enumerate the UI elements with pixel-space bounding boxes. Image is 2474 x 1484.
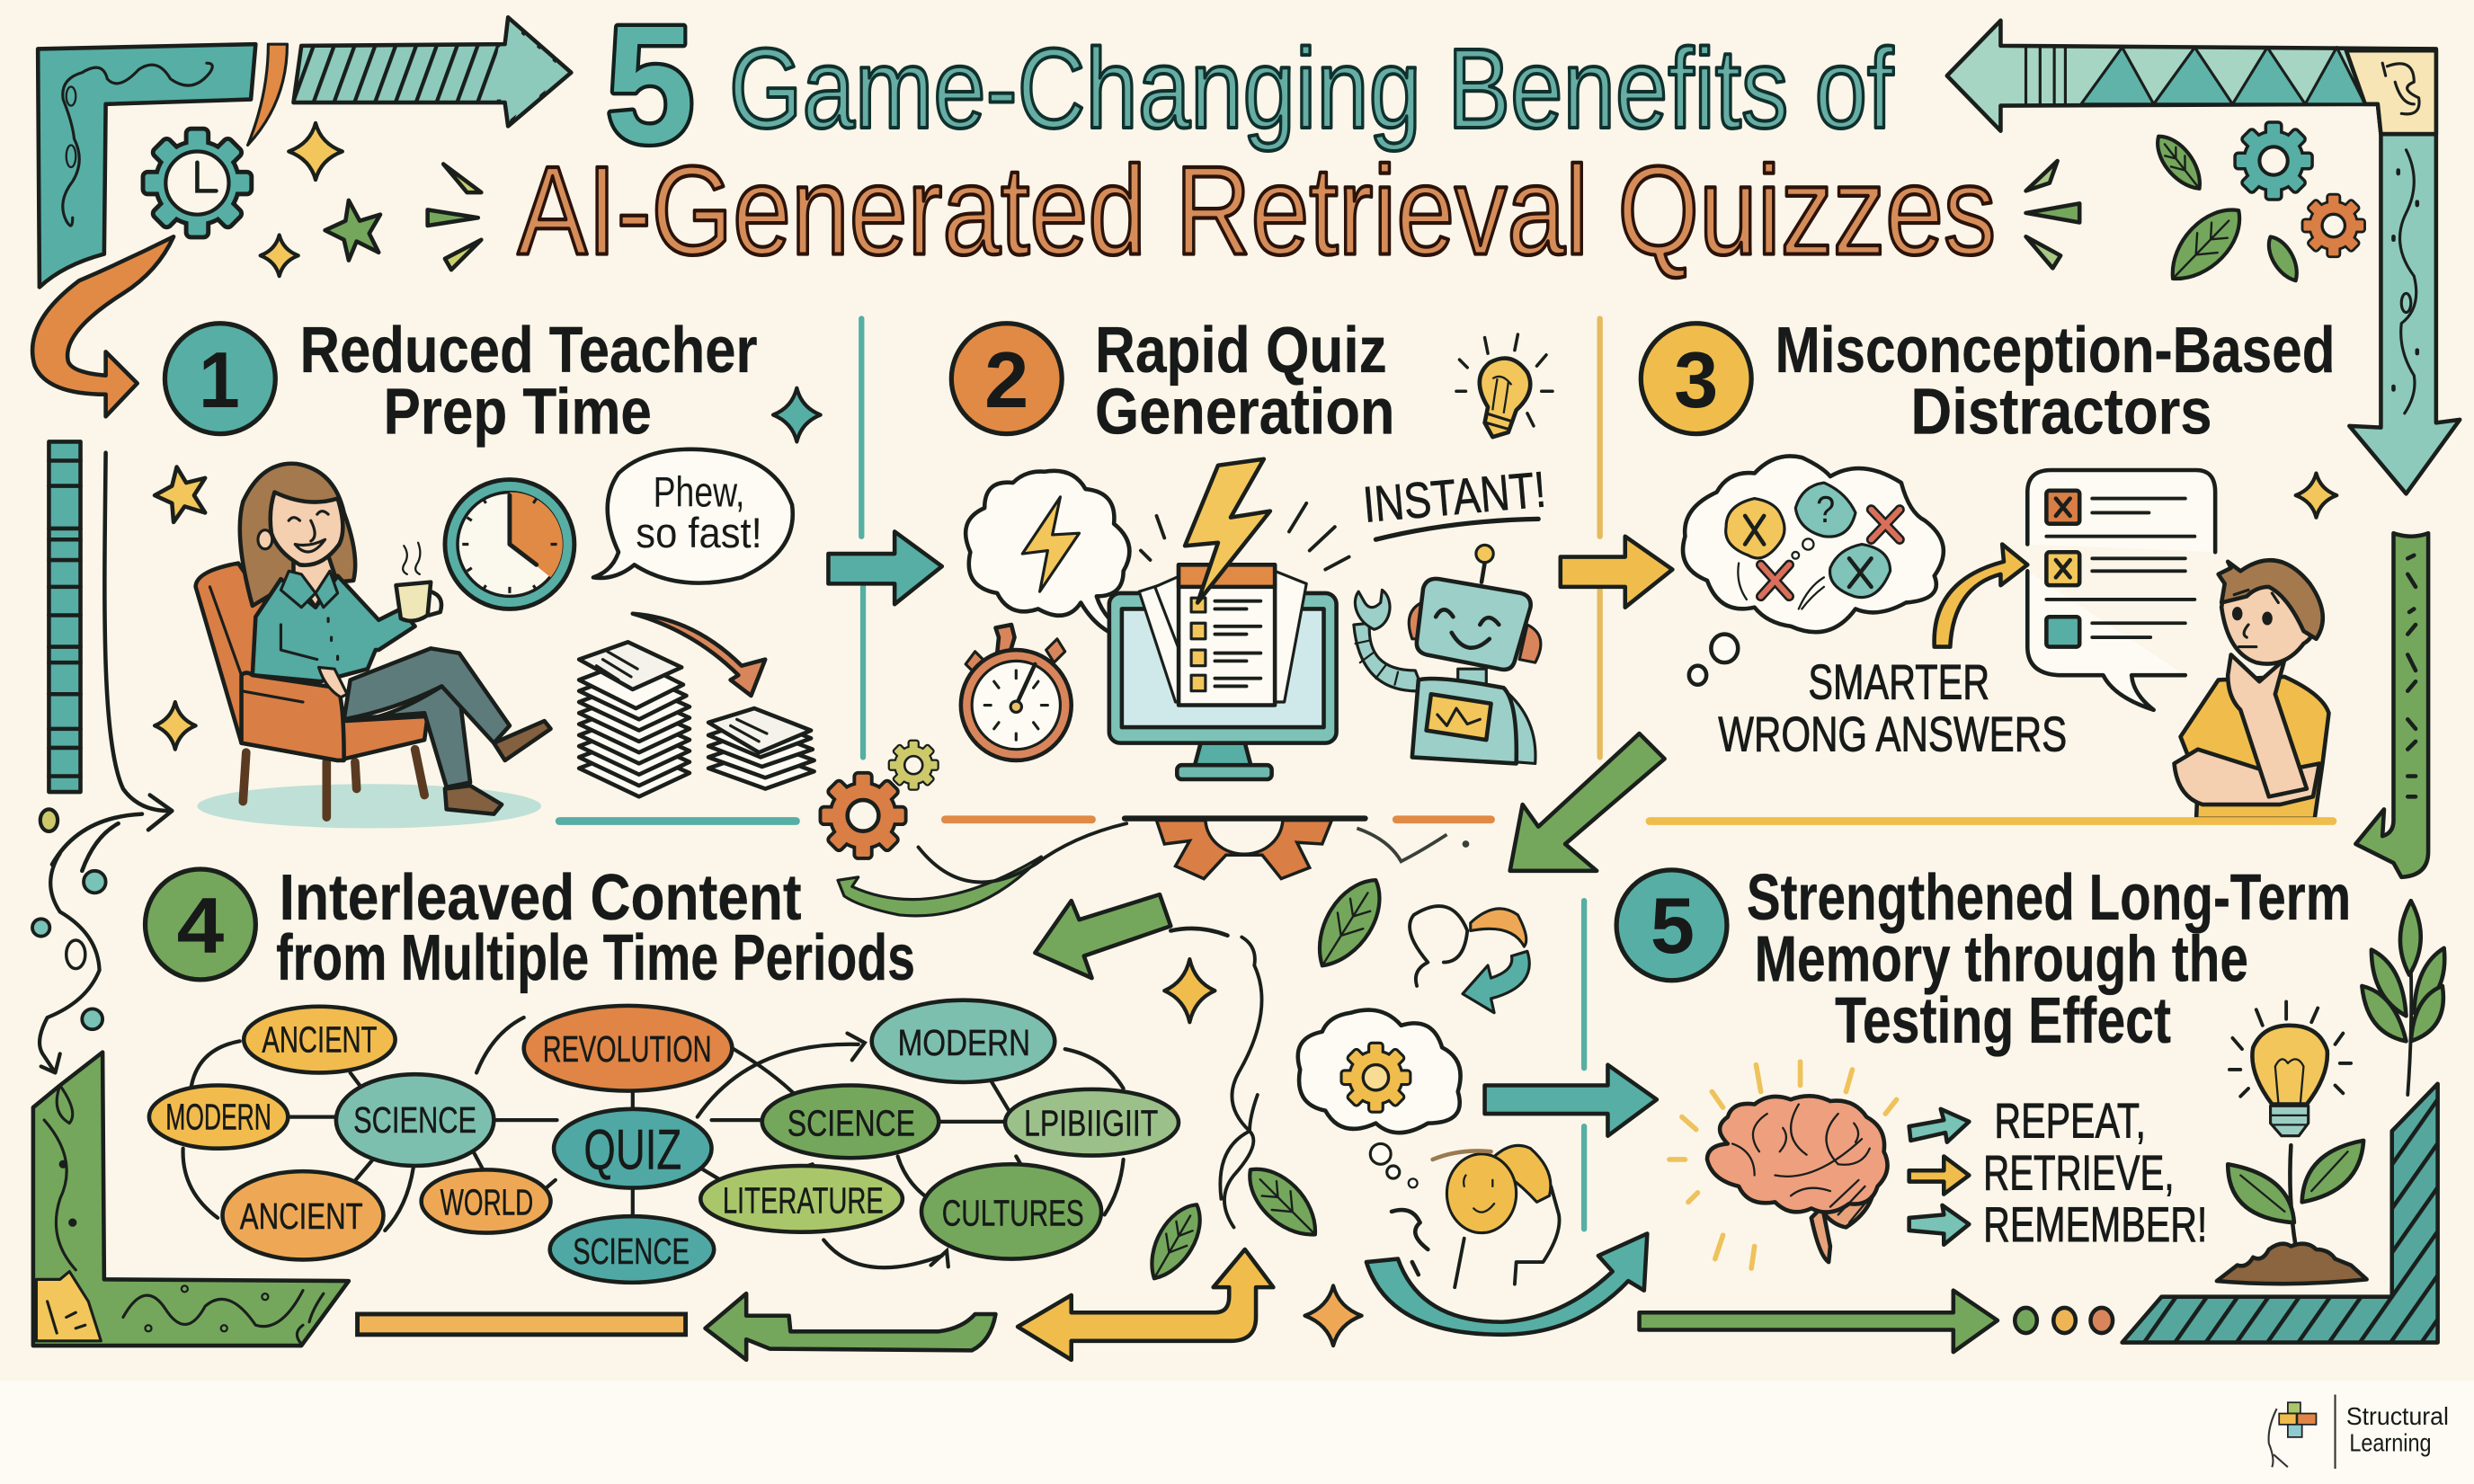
connector lines bbox=[183, 1017, 1124, 1267]
robot bbox=[1354, 545, 1541, 763]
arrow teal 1 to 2 bbox=[828, 531, 942, 604]
heading 2: Rapid Quiz bbox=[1095, 315, 1387, 387]
heading 2: Generation bbox=[1095, 377, 1395, 449]
wall clock bbox=[445, 480, 574, 609]
node literature: LITERATURE bbox=[723, 1180, 884, 1222]
ears bbox=[1409, 602, 1421, 639]
quiz sheets bbox=[1139, 564, 1306, 706]
face bbox=[271, 493, 343, 565]
heading 5: Testing Effect bbox=[1835, 985, 2171, 1057]
ear bbox=[258, 530, 272, 549]
wrench bbox=[1355, 590, 1390, 629]
repeat retrieve remember list bbox=[1909, 1093, 2207, 1252]
screen bbox=[1427, 694, 1491, 740]
paper stack short bbox=[708, 708, 814, 789]
light bulb over plant bbox=[2229, 1001, 2351, 1136]
thin flowing line centre bbox=[1220, 937, 1262, 1227]
hatched bottom-right corner bbox=[2122, 1084, 2438, 1343]
paper stack tall bbox=[579, 642, 690, 796]
node modern light teal: MODERN bbox=[898, 1022, 1030, 1063]
head bbox=[1417, 579, 1531, 670]
gear olive bbox=[890, 742, 938, 789]
sparkle yellow bbox=[2296, 474, 2336, 518]
curved arrow yellow bbox=[1935, 545, 2027, 647]
badge 5 bbox=[1616, 870, 1727, 981]
sparkle orange centre bbox=[1304, 1285, 1362, 1346]
light bulb bbox=[1456, 334, 1553, 437]
burst left bbox=[428, 164, 481, 270]
hair bbox=[2219, 560, 2323, 639]
heading 5: Memory through the bbox=[1755, 924, 2248, 996]
badge 1: 1 bbox=[199, 336, 240, 424]
heading 3: Distractors bbox=[1910, 377, 2212, 449]
thought cloud of misconceptions: ? bbox=[1816, 488, 1835, 530]
node ancient orange bbox=[222, 1171, 384, 1259]
thought cloud with bolt bbox=[966, 471, 1135, 639]
orange curved arrow to benefit 1 bbox=[32, 236, 174, 416]
neck bbox=[1458, 669, 1486, 688]
big green arrow from panel 3 bbox=[1510, 733, 1665, 871]
smarter wrong answers label bbox=[1718, 654, 2067, 761]
shadow under chair bbox=[197, 784, 541, 828]
node garbled label bbox=[1005, 1089, 1179, 1156]
stopwatch bbox=[961, 625, 1072, 760]
arrow teal to panel 5 bbox=[1485, 1065, 1657, 1136]
underline teal bbox=[556, 817, 800, 825]
green arrow right side bbox=[2355, 533, 2428, 877]
head sketch top bbox=[1410, 906, 1529, 1013]
node revolution: REVOLUTION bbox=[543, 1028, 712, 1070]
repeat retrieve remember list: RETRIEVE, bbox=[1983, 1145, 2175, 1200]
thought cloud outline bbox=[1298, 1010, 1461, 1133]
left swirl decoration bbox=[32, 853, 106, 1072]
heading 1: Prep Time bbox=[384, 377, 652, 449]
heading 1 bbox=[299, 315, 757, 449]
rays around bolt bbox=[1141, 503, 1349, 570]
thought bubbles bbox=[1370, 1143, 1418, 1187]
node quiz bbox=[554, 1109, 712, 1188]
chair legs bbox=[243, 750, 424, 817]
title line 2: AI-Generated Retrieval Quizzes bbox=[518, 140, 1996, 281]
panel 2: rapid quiz generation bbox=[951, 315, 1553, 779]
repeat retrieve remember list: REMEMBER! bbox=[1983, 1197, 2207, 1252]
neck bbox=[293, 555, 334, 608]
hand arm to chin bbox=[2228, 654, 2307, 796]
gears at junction bbox=[822, 742, 1491, 916]
flow line into panel 1 bbox=[52, 453, 172, 871]
hatched arrow top-left bbox=[293, 17, 571, 126]
brain bbox=[1669, 1062, 1897, 1268]
node cultures bbox=[921, 1164, 1101, 1259]
plant with soil bbox=[2217, 1141, 2367, 1284]
title bbox=[518, 0, 1996, 281]
structural learning logo bbox=[2269, 1394, 2449, 1469]
curved teal arrow bbox=[1366, 1233, 1647, 1335]
divider 1-2 bbox=[861, 319, 863, 757]
node cultures: CULTURES bbox=[942, 1193, 1084, 1234]
node modern yellow: MODERN bbox=[165, 1097, 271, 1138]
node modern light teal bbox=[872, 1000, 1055, 1082]
antenna bbox=[1482, 564, 1485, 582]
heading 3: Misconception-Based bbox=[1775, 315, 2336, 387]
node garbled label: LPIBIIGIIT bbox=[1024, 1103, 1158, 1144]
heading 3 bbox=[1775, 315, 2336, 449]
underline yellow bbox=[1646, 817, 2336, 825]
node world: WORLD bbox=[441, 1181, 533, 1222]
node quiz: QUIZ bbox=[583, 1119, 681, 1182]
divider 2-3 bbox=[1598, 319, 1601, 757]
scribble bbox=[1357, 828, 1446, 861]
folded arm bbox=[2175, 750, 2319, 804]
hand on armrest bbox=[319, 667, 347, 698]
node world bbox=[422, 1169, 551, 1233]
thinking boy bbox=[2175, 560, 2329, 819]
head bbox=[2221, 580, 2313, 664]
gear in thought cloud bbox=[1343, 1044, 1409, 1111]
green J arrow bbox=[706, 1293, 995, 1360]
half gear orange bbox=[1122, 815, 1368, 879]
green bottom-left corner ornament bbox=[33, 1053, 349, 1346]
leaf top centre bbox=[1304, 868, 1394, 977]
logo text: Structural bbox=[2346, 1402, 2449, 1430]
answer list bubble bbox=[2027, 470, 2215, 710]
burst right bbox=[2026, 161, 2079, 268]
gear orange top right bbox=[2303, 196, 2363, 255]
clock gear bbox=[145, 131, 249, 235]
heading 4: from Multiple Time Periods bbox=[276, 922, 915, 994]
panel 1: reduced teacher prep time bbox=[40, 315, 821, 871]
sparkle teal bbox=[773, 388, 821, 441]
badge 3 bbox=[1641, 324, 1751, 434]
leaf far lower bbox=[1139, 1195, 1212, 1287]
star green bbox=[325, 200, 380, 261]
leaf small lower bbox=[2262, 232, 2304, 286]
badge 5: 5 bbox=[1651, 882, 1695, 970]
yellow up arrow bbox=[1018, 1249, 1273, 1360]
top-right arrow frame bbox=[1947, 21, 2460, 493]
orange bar bbox=[358, 1314, 686, 1335]
arrow teal small lower bbox=[1909, 1205, 1969, 1245]
node science teal bbox=[550, 1216, 714, 1283]
gear orange bbox=[822, 775, 904, 857]
sparkle yellow left bbox=[155, 702, 196, 750]
panel 5: strengthened long-term memory bbox=[1616, 862, 2367, 1284]
arrow teal small bbox=[1909, 1109, 1969, 1142]
lightning bolt bbox=[1185, 459, 1270, 602]
speech bubble: phew, so fast: Phew, bbox=[654, 468, 744, 516]
memory process illustration bbox=[1298, 906, 1647, 1335]
smarter wrong answers label: WRONG ANSWERS bbox=[1718, 706, 2067, 761]
green swoosh connector bbox=[838, 823, 1126, 916]
right arm bbox=[1494, 689, 1535, 763]
body bbox=[1412, 679, 1517, 763]
left arm bbox=[1354, 623, 1423, 691]
armchair body bbox=[196, 564, 428, 760]
sprout right edge bbox=[2362, 901, 2444, 1095]
title line 1: Game-Changing Benefits of bbox=[729, 25, 1894, 152]
badge 2 bbox=[951, 324, 1062, 434]
three dots bbox=[2015, 1308, 2113, 1333]
leaf lower centre bbox=[1237, 1156, 1329, 1249]
sparkle yellow centre bbox=[1164, 959, 1215, 1022]
orange dashes bbox=[945, 817, 1491, 822]
star yellow bbox=[155, 467, 205, 522]
shirt bbox=[2181, 677, 2329, 819]
arrow down orange bbox=[633, 614, 765, 696]
speech bubble: phew, so fast bbox=[593, 449, 793, 583]
panel 3: misconception-based distractors bbox=[1641, 315, 2336, 825]
thought cloud of misconceptions bbox=[1683, 456, 1944, 685]
heading 4 bbox=[276, 862, 915, 994]
lower leg pants bbox=[344, 686, 470, 787]
node science light teal: SCIENCE bbox=[353, 1099, 476, 1141]
dot olive bbox=[40, 809, 58, 831]
speech bubble: phew, so fast: so fast! bbox=[636, 510, 762, 557]
logo text bbox=[2346, 1402, 2449, 1457]
node ancient yellow bbox=[244, 1007, 396, 1072]
arrow head tint bbox=[489, 23, 566, 120]
node science light teal bbox=[336, 1074, 494, 1166]
gear teal top right bbox=[2237, 124, 2310, 198]
panel 4: interleaved content bbox=[145, 862, 1179, 1283]
heading 1: Reduced Teacher bbox=[299, 315, 757, 387]
monitor bbox=[1109, 593, 1337, 779]
logo text: Learning bbox=[2349, 1429, 2432, 1457]
heading 2 bbox=[1095, 315, 1395, 449]
node modern yellow bbox=[149, 1085, 288, 1149]
concept map bbox=[149, 1000, 1179, 1283]
node ancient orange: ANCIENT bbox=[240, 1195, 363, 1237]
node science green: SCIENCE bbox=[788, 1103, 915, 1144]
heading 5 bbox=[1747, 862, 2351, 1057]
badge 4: 4 bbox=[177, 882, 224, 970]
shirt bbox=[253, 576, 415, 681]
badge 3: 3 bbox=[1674, 336, 1718, 424]
coffee cup bbox=[396, 582, 431, 621]
arrow yellow 2 to 3 bbox=[1561, 537, 1672, 608]
node literature bbox=[700, 1166, 903, 1232]
hair bbox=[240, 464, 355, 606]
logo icon bbox=[2269, 1402, 2316, 1467]
armrest bbox=[242, 673, 344, 760]
badge 2: 2 bbox=[984, 336, 1028, 424]
badge 1 bbox=[165, 324, 275, 434]
node revolution bbox=[524, 1006, 732, 1091]
person with yellow mind bbox=[1392, 1145, 1560, 1287]
divider 4-5 bbox=[1582, 901, 1586, 1229]
thigh pants bbox=[344, 648, 510, 743]
leaf small bbox=[2149, 129, 2210, 197]
shoes bbox=[494, 721, 551, 760]
top-left corner ornament bbox=[38, 44, 287, 287]
green arrow bottom right bbox=[1640, 1291, 1998, 1352]
woman in armchair bbox=[196, 464, 551, 817]
sparkle small yellow bbox=[261, 235, 298, 276]
sparkle yellow bbox=[289, 123, 343, 180]
big green arrow to panel 4 bbox=[1035, 894, 1227, 978]
badge 4 bbox=[145, 869, 255, 980]
repeat retrieve remember list: REPEAT, bbox=[1994, 1093, 2146, 1148]
leaf large bbox=[2158, 196, 2254, 293]
node ancient yellow: ANCIENT bbox=[262, 1019, 377, 1061]
node science green bbox=[762, 1085, 939, 1158]
ladder bar left bbox=[49, 441, 81, 792]
instant label: INSTANT! bbox=[1361, 460, 1548, 533]
heading 4: Interleaved Content bbox=[280, 862, 802, 934]
node science teal: SCIENCE bbox=[573, 1231, 690, 1272]
smarter wrong answers label: SMARTER bbox=[1808, 654, 1989, 709]
arrow yellow small bbox=[1909, 1156, 1969, 1195]
